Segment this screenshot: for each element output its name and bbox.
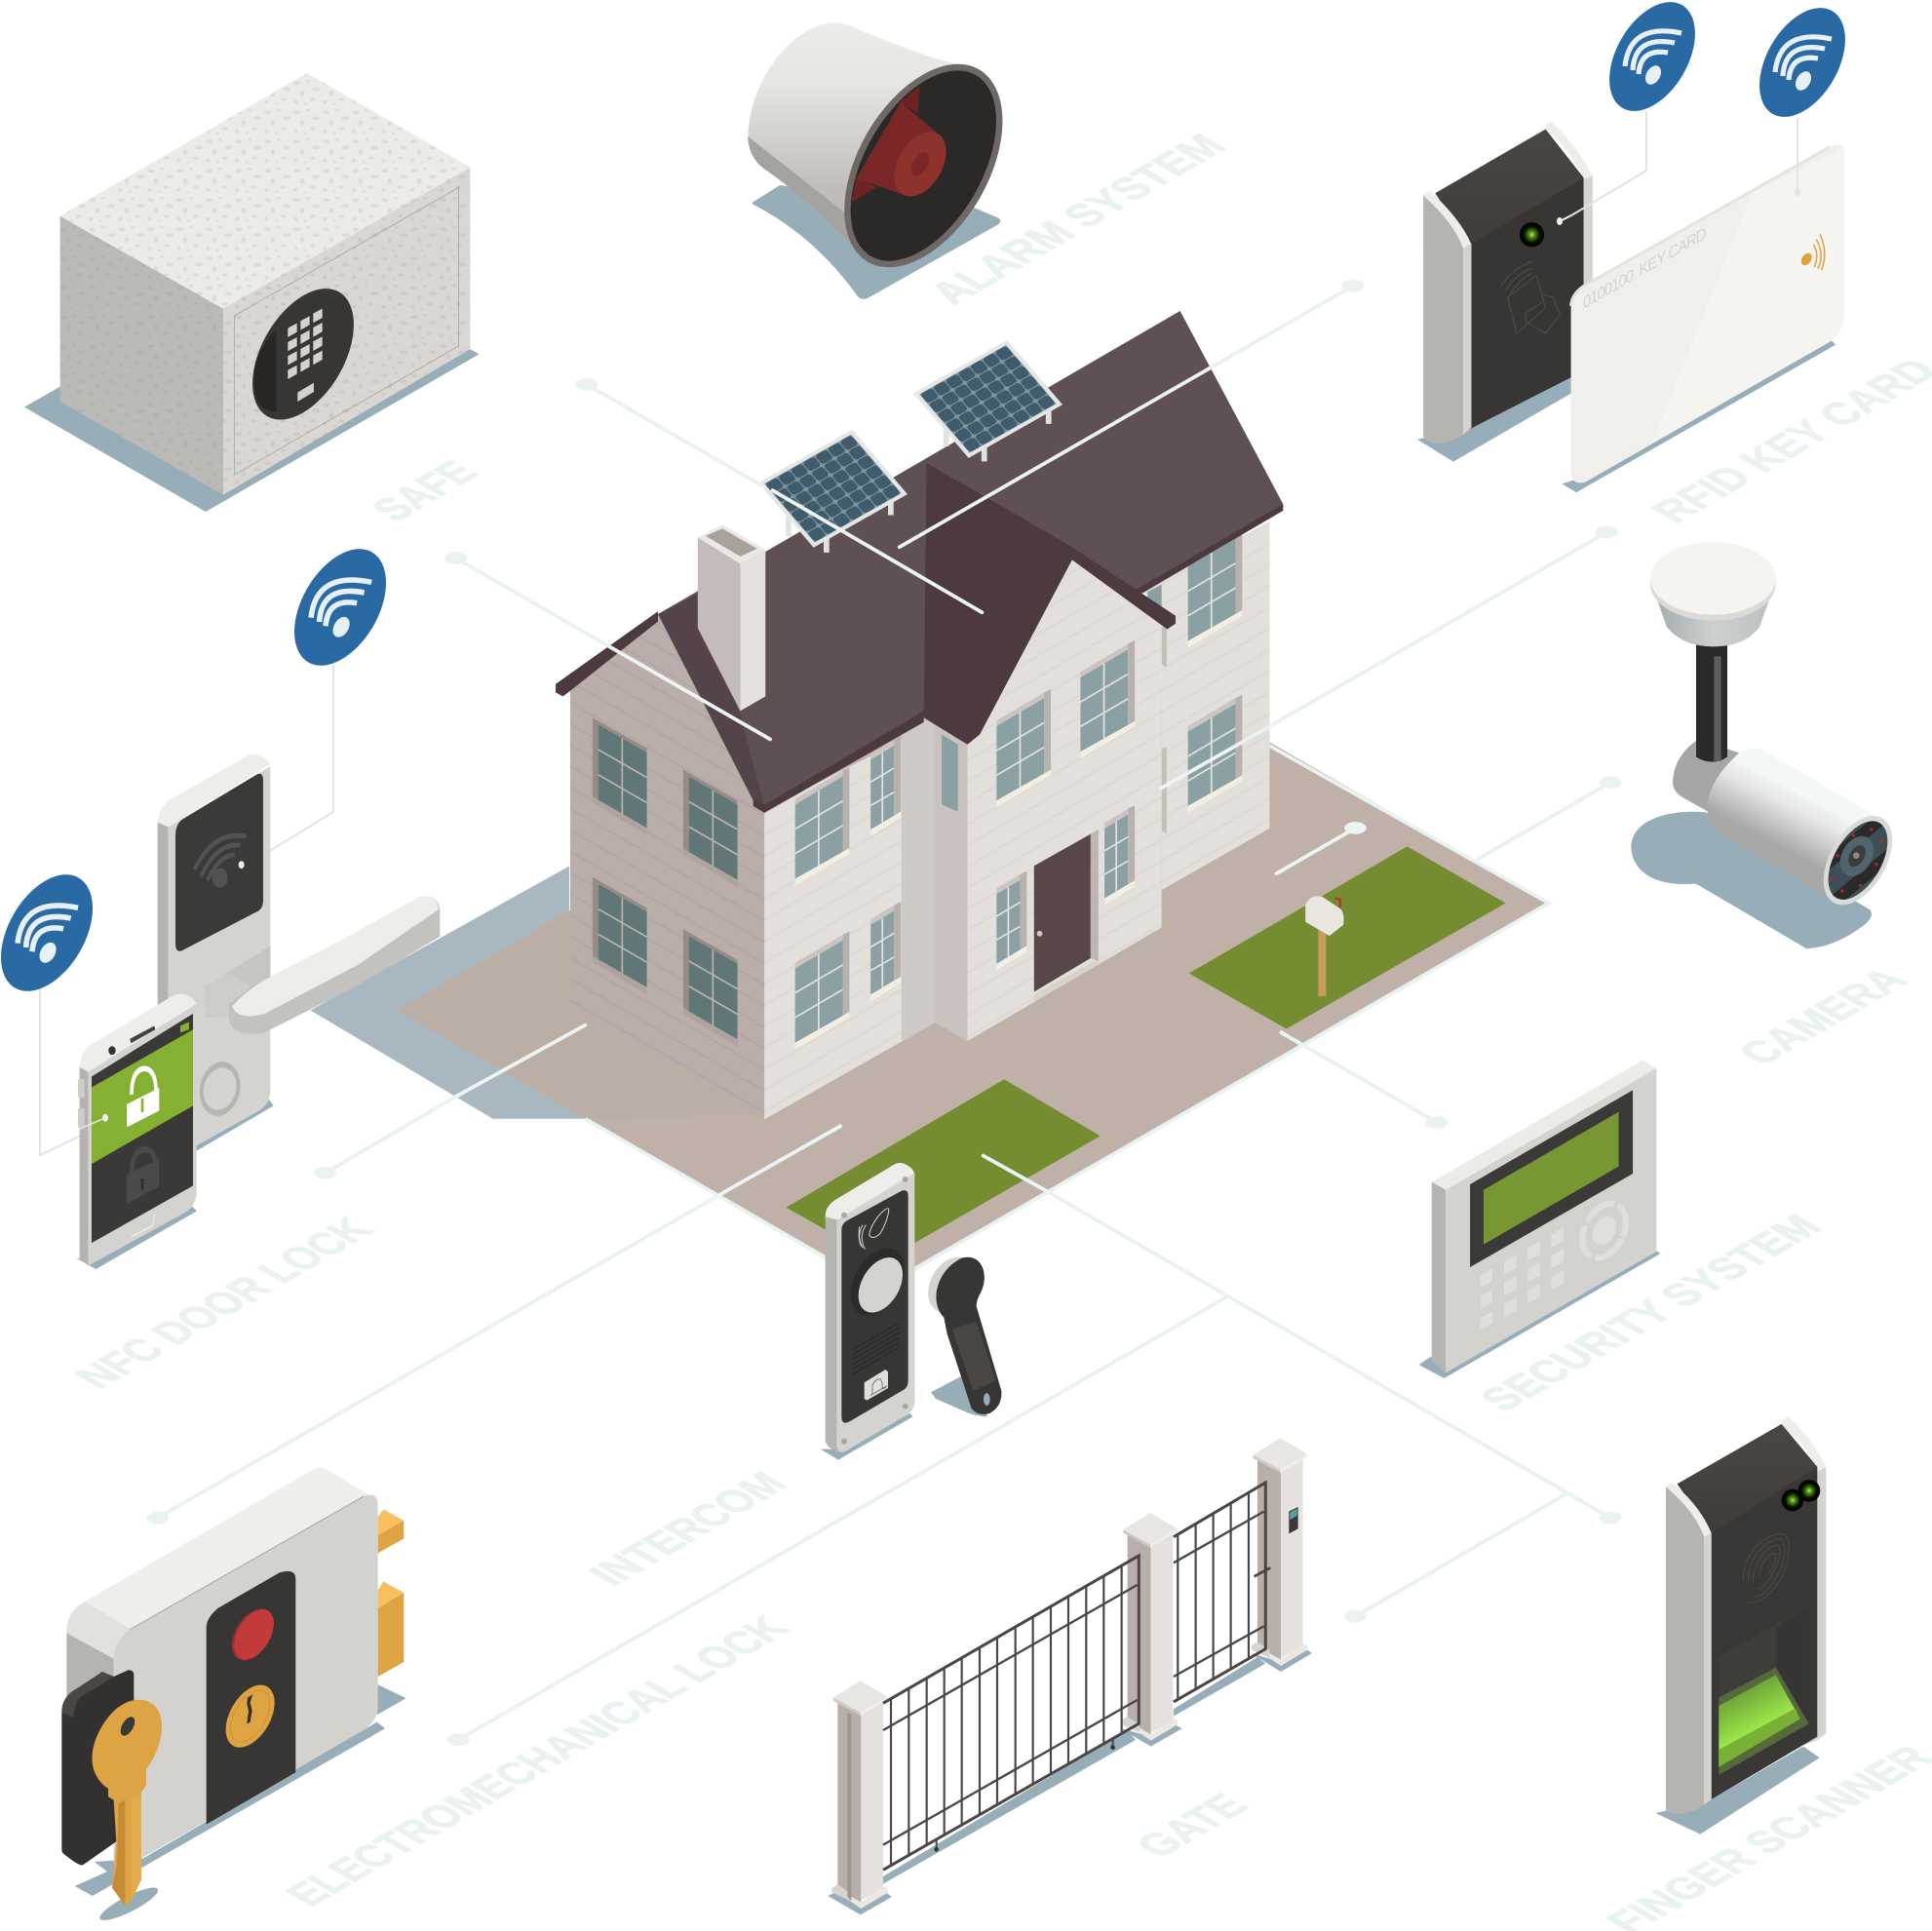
roof eaves: [556, 504, 1283, 813]
keypad navigation ring: [1574, 1197, 1635, 1264]
reader card icon: [1500, 261, 1560, 333]
label: SECURITY SYSTEM: SECURITY SYSTEM: [1469, 1208, 1832, 1417]
siren driver: [852, 86, 957, 206]
safe keypad dial: [231, 271, 374, 437]
key: [92, 1700, 162, 1907]
phone badge: [0, 859, 111, 1007]
red button: [223, 1603, 282, 1668]
pedestrian gate leaf: [1174, 1483, 1270, 1702]
safe: [24, 73, 480, 512]
label: ALARM SYSTEM: ALARM SYSTEM: [918, 127, 1236, 311]
windows: [593, 717, 647, 835]
lawn right: [1189, 846, 1506, 1028]
handle: [206, 896, 440, 1034]
electromechanical lock: [61, 1468, 406, 1926]
camera body: [1707, 749, 1876, 902]
security keypad: [1419, 1061, 1660, 1378]
label: ELECTROMECHANICAL LOCK: ELECTROMECHANICAL LOCK: [275, 1609, 799, 1912]
keypad display: [1470, 1090, 1633, 1267]
gate post left: [831, 1680, 888, 1909]
keyhole plate: [215, 1677, 285, 1756]
intercom speaker grille: [852, 1323, 899, 1374]
camera: [1631, 542, 1907, 948]
intercom camera: [839, 1239, 915, 1325]
NFC door lock: [158, 754, 440, 1162]
gate access panel: [1289, 1507, 1298, 1533]
camera shadow: [1631, 812, 1872, 948]
back right wall: [1142, 521, 1269, 890]
solar panel left: [758, 430, 908, 553]
roof dark front gable: [924, 463, 1072, 745]
label: GATE: GATE: [1125, 1787, 1257, 1864]
RFID badge left: [1592, 0, 1713, 126]
lock nfc icon: [194, 835, 247, 880]
left gable wall: [570, 614, 764, 1119]
house: [556, 311, 1343, 1119]
RFID badge right: [1742, 0, 1863, 132]
keypad buttons: [1481, 1227, 1564, 1330]
card text: 0100100 KEY CARD: [1583, 223, 1706, 313]
badge leader lines: [40, 111, 1800, 1155]
gate post right: [1252, 1438, 1307, 1666]
connector lines: [146, 280, 1621, 1746]
gate post middle: [1122, 1513, 1178, 1741]
front gable wall: [967, 559, 1162, 1041]
bolts: [378, 1509, 404, 1677]
central recess: [935, 723, 967, 1041]
gate: [828, 1438, 1312, 1914]
alarm siren: [748, 22, 1035, 299]
camera lens: [1823, 816, 1893, 905]
camera joint: [1673, 741, 1742, 812]
solar panel right: [913, 340, 1063, 461]
scanner recess: [1719, 1606, 1809, 1775]
lawn front: [786, 1079, 1101, 1261]
roof main: [658, 311, 1283, 810]
sliding gate leaf: [883, 1556, 1139, 1870]
label: INTERCOM: INTERCOM: [578, 1465, 797, 1592]
scanner LEDs: [1782, 1480, 1820, 1511]
key holder block: [61, 1670, 134, 1865]
RFID reader: [1417, 122, 1593, 462]
front left wall: [764, 723, 935, 1119]
label: NFC DOOR LOCK: NFC DOOR LOCK: [64, 1211, 383, 1395]
smartphone: [75, 994, 197, 1269]
ground shadow under the house: [311, 867, 587, 1119]
finger scanner: [1655, 1416, 1826, 1834]
camera dome: [1650, 542, 1776, 646]
roof hip left: [658, 595, 764, 806]
mailbox: [1305, 896, 1343, 996]
door: [1034, 830, 1099, 1002]
intercom: [821, 1163, 915, 1460]
camera pole: [1696, 643, 1727, 762]
door lock badge: [276, 533, 405, 681]
chimney: [698, 524, 765, 711]
intercom bell button: [865, 1370, 888, 1401]
key fob: [918, 1249, 1001, 1416]
fingerprint mark: [1743, 1533, 1789, 1603]
label: SAFE: SAFE: [361, 453, 487, 527]
RFID key card: [1562, 145, 1844, 492]
ground plot with lawns: [397, 625, 1549, 1289]
